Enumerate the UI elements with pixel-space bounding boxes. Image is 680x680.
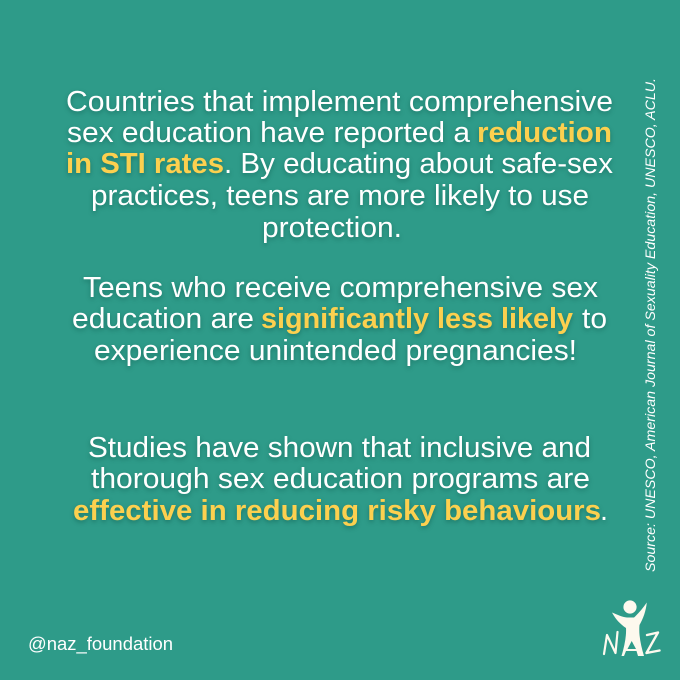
text block: risky behaviours: Studies have shown that inclusive and xyxy=(88,432,591,464)
text block: STI rates: in STI rates xyxy=(66,148,224,180)
text block: unintended pregnancies: significantly less likely xyxy=(261,303,573,335)
text block: unintended pregnancies: education are xyxy=(72,303,254,335)
text block: unintended pregnancies: to xyxy=(582,303,607,335)
text block: risky behaviours: . xyxy=(600,495,608,527)
text block: risky behaviours xyxy=(73,432,608,527)
text block: risky behaviours: effective in reducing risky behaviours xyxy=(73,495,601,527)
text block: STI rates: Countries that implement comprehensive xyxy=(66,86,613,118)
text block: STI rates: reduction xyxy=(477,117,612,149)
icon: figure body forming letter A xyxy=(612,602,647,656)
text block: unintended pregnancies xyxy=(72,272,607,367)
text block: STI rates xyxy=(66,86,614,244)
text block: STI rates: sex education have reported a xyxy=(67,117,471,149)
social handle: @naz_foundation xyxy=(28,634,173,655)
text block: STI rates: practices, teens are more likely to use xyxy=(91,180,589,212)
text block: unintended pregnancies: experience unintended pregnancies! xyxy=(94,335,577,367)
source note: Source: UNESCO, American Journal of Sexuality Education, UNESCO, ACLU. xyxy=(643,78,659,572)
logo letter N xyxy=(604,632,618,654)
logo letter Z xyxy=(646,632,660,653)
text block: STI rates: . By educating about safe-sex xyxy=(224,148,614,180)
logo: NAZ xyxy=(604,600,660,656)
icon: figure head xyxy=(623,600,637,614)
text block: STI rates: protection. xyxy=(262,212,402,244)
text block: unintended pregnancies: Teens who receive comprehensive sex xyxy=(83,272,599,304)
text block: risky behaviours: thorough sex education programs are xyxy=(91,463,590,495)
